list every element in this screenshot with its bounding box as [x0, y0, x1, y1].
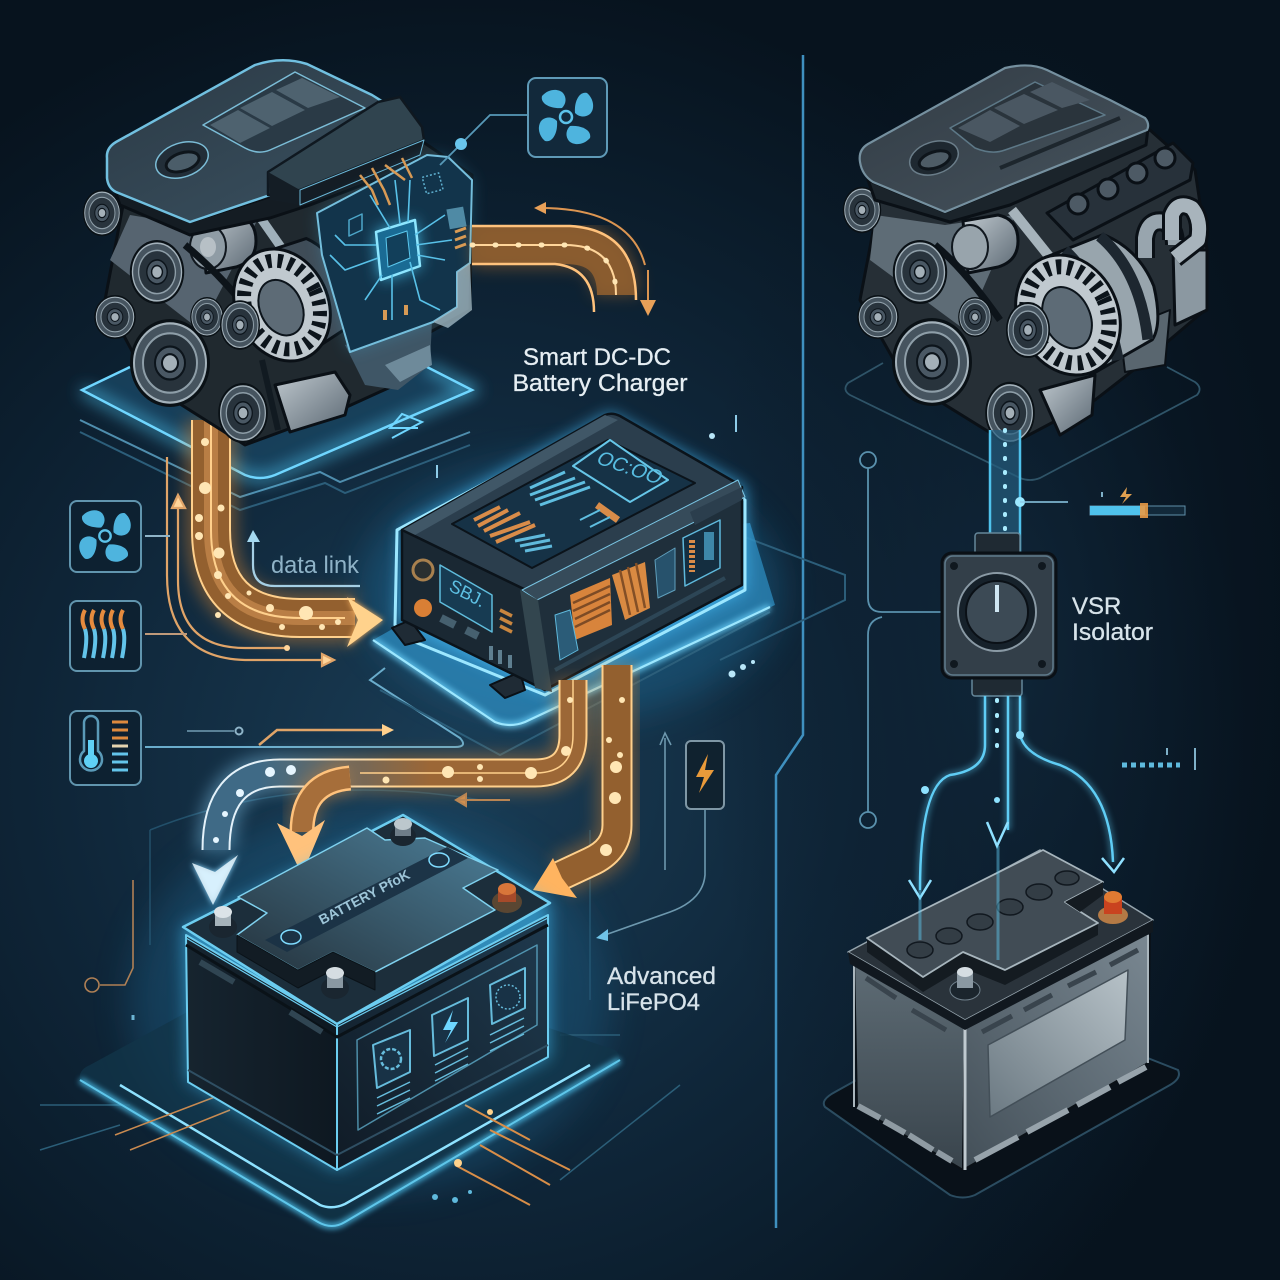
traces	[330, 180, 452, 320]
charger top screen: OC:OO	[592, 448, 667, 489]
label: VSR Isolator	[1072, 593, 1153, 646]
icon: gauge tile	[490, 968, 525, 1051]
icon: pulley upper	[83, 190, 121, 236]
knob	[958, 573, 1036, 651]
cover vents	[203, 72, 365, 152]
arrow: left pointer	[456, 794, 510, 806]
raised bar	[268, 97, 424, 195]
terminal positive	[1098, 891, 1128, 924]
label: VSR Isolator: Isolator	[1072, 619, 1153, 646]
charger front	[402, 530, 545, 690]
arrow: orange flow from engine controller	[472, 202, 656, 316]
icon: pulley mid	[125, 235, 189, 309]
connectors: right side circuit	[860, 452, 943, 828]
left side	[854, 958, 965, 1170]
icon: alternator pulley	[220, 300, 260, 350]
divider line between systems	[776, 55, 803, 1228]
icon: idler	[190, 297, 224, 337]
cylinder	[952, 215, 1018, 273]
panel: VSR isolator	[942, 533, 1056, 696]
orange bars	[474, 507, 535, 542]
panel: right battery platform	[824, 1000, 1179, 1198]
terminal negative	[950, 967, 980, 1000]
top	[848, 850, 1153, 1020]
panel: main battery	[183, 815, 550, 1170]
vents	[866, 950, 1138, 1032]
engine cover top	[107, 60, 423, 222]
charger side internals	[555, 520, 725, 670]
raised cover	[867, 850, 1103, 977]
charger top screen	[452, 440, 695, 568]
blue chart	[515, 535, 552, 551]
valve block	[1047, 143, 1193, 240]
translucent flow over battery	[920, 846, 998, 960]
engine block	[105, 140, 472, 445]
arrow: blue flow to isolator	[990, 430, 1068, 555]
oil cap	[151, 135, 213, 185]
pulleys	[843, 187, 881, 233]
manifold lower	[1173, 250, 1207, 325]
icon: pulley small left	[94, 295, 136, 339]
battery left side	[186, 935, 337, 1170]
label: data link: data link	[271, 552, 360, 579]
arrow: blue flows to battery	[909, 696, 1195, 898]
icon: starter	[275, 372, 350, 432]
vents	[200, 962, 322, 1032]
arrow: orange branch to battery	[277, 778, 350, 875]
icon: main crank pulley	[130, 319, 210, 407]
indicator: charge bar	[1090, 487, 1185, 518]
label	[988, 970, 1128, 1117]
terminals	[209, 818, 522, 999]
panel: lead-acid battery	[848, 846, 1153, 1170]
label: VSR Isolator: VSR	[1072, 593, 1121, 620]
charger top	[402, 414, 740, 592]
icon: belt	[262, 360, 278, 430]
panel: battery platform	[40, 790, 680, 1226]
battery raised cover	[237, 828, 498, 972]
arrow: orange flow to battery right	[533, 665, 625, 898]
battery top	[183, 815, 550, 1024]
panel: DC-DC charger	[392, 413, 745, 698]
icon: gear tile	[373, 1030, 410, 1114]
screen readout	[573, 440, 668, 502]
charger side	[530, 487, 742, 690]
platform outline	[845, 363, 1200, 480]
alternator	[996, 221, 1177, 394]
battery right side	[337, 915, 548, 1170]
icon: thermometer box	[70, 711, 141, 785]
panel: right side engine	[843, 65, 1207, 480]
label: Smart DC-DC Battery Charger: Smart DC-DC	[523, 344, 671, 371]
label: Advanced LiFePO4	[607, 963, 716, 1016]
cover	[868, 128, 1148, 222]
accent: left battery connector	[85, 880, 133, 1020]
charger accents	[437, 415, 755, 678]
connectors: icon links	[145, 536, 463, 747]
arrow: orange flow from engine to charger	[195, 420, 383, 647]
bolts	[1068, 148, 1175, 214]
accents: bottom traces	[455, 1105, 570, 1205]
icon: fan box top	[528, 78, 607, 157]
chip	[376, 220, 420, 280]
panel: circuit board overlay	[317, 155, 472, 352]
icon: heat box	[70, 601, 141, 671]
connectors: lightning box and up arrow	[596, 733, 705, 941]
label: Advanced LiFePO4: LiFePO4	[607, 989, 700, 1016]
icon: belt lines	[255, 210, 318, 300]
raised cover side	[867, 923, 1098, 992]
icon: cylinder idler	[190, 215, 256, 273]
panel: charger platform	[373, 520, 845, 755]
arrow: merged flow from charger to battery, orange fading to white	[192, 680, 573, 905]
panel: engine platform	[80, 367, 472, 510]
label: Smart DC-DC Battery Charger: Battery Charger	[512, 370, 688, 397]
charger front display: SBJ.	[446, 575, 488, 612]
icon: fan box left	[70, 501, 141, 572]
engine cover side	[113, 138, 423, 235]
icon: bolt tile	[432, 998, 468, 1081]
pipes	[1145, 205, 1199, 258]
battery side panel	[357, 945, 537, 1130]
label strip: BATTERY PfoK	[316, 866, 412, 928]
right side	[963, 925, 1150, 1170]
label strip	[265, 847, 468, 952]
icon: alternator	[216, 224, 367, 377]
skirt	[858, 1106, 952, 1161]
charger front display	[413, 560, 512, 668]
charger mounting tabs	[392, 620, 525, 698]
label: Advanced LiFePO4: Advanced	[607, 963, 716, 990]
block	[860, 130, 1207, 445]
panel: engine with smart controller	[83, 60, 472, 445]
connector: fan icon link	[440, 115, 527, 165]
icon: lower pulley	[218, 383, 268, 443]
icon: lightning box	[686, 741, 724, 809]
arrow: thin return flows	[167, 457, 360, 666]
label: Smart DC-DC Battery Charger	[512, 344, 688, 397]
